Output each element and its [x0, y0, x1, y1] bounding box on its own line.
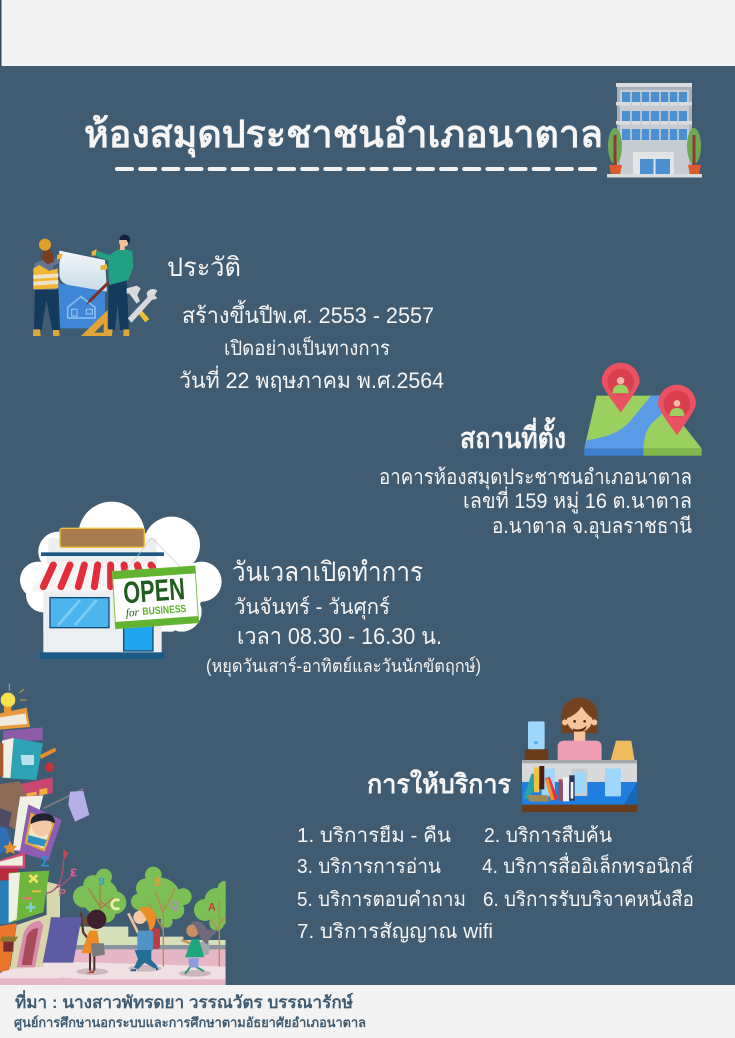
location line 2: เลขที่ 159 หมู่ 16 ต.นาตาล	[463, 486, 692, 514]
icon: workers with blueprint	[33, 235, 157, 336]
history text line 3: วันที่ 22 พฤษภาคม พ.ศ.2564	[179, 365, 444, 393]
heading: history: ประวัติ	[167, 252, 241, 282]
service 7: 7. บริการสัญญาณ wifi	[297, 921, 493, 943]
icon: shop in cloud with open sign	[20, 502, 222, 659]
pencil	[86, 282, 109, 305]
tree 2: 8	[154, 875, 161, 889]
title dashed underline	[117, 167, 597, 171]
illustration: book tower and children: P	[58, 888, 66, 900]
door	[124, 625, 153, 651]
shadows	[76, 968, 108, 975]
icon: library building	[607, 83, 702, 178]
awning	[32, 562, 157, 592]
service 6: 6. บริการรับบริจาคหนังสือ	[483, 889, 694, 911]
shop body	[43, 590, 162, 653]
icon: map with pins	[584, 363, 702, 456]
book stack	[0, 708, 30, 730]
section: history	[167, 252, 444, 393]
triangle ruler	[81, 310, 108, 336]
flag	[43, 789, 83, 808]
tools	[136, 308, 149, 322]
child 3	[182, 921, 217, 974]
tree 1	[73, 869, 126, 927]
tree 3: A	[208, 902, 216, 914]
source organization: ศูนย์การศึกษานอกระบบและการศึกษาตามอัธยาศัยอำเภอนาตาล	[14, 1015, 366, 1031]
bulb	[1, 683, 27, 714]
window	[50, 598, 109, 628]
top strip	[0, 0, 735, 66]
service 2: 2. บริการสืบค้น	[484, 825, 612, 847]
right worker	[108, 280, 129, 330]
street scene	[60, 866, 226, 985]
open sign: BUSINESS	[142, 603, 187, 618]
tree 1: 9	[98, 876, 105, 888]
open sign	[112, 566, 199, 629]
sheet of paper	[59, 251, 107, 292]
tree 3	[194, 881, 226, 967]
illustration: book tower and children: ε	[70, 865, 77, 881]
illustration: book tower and children	[0, 683, 232, 985]
location line 3: อ.นาตาล จ.อุบลราชธานี	[492, 515, 692, 539]
child 1	[81, 910, 106, 973]
heading: location: สถานที่ตั้ง	[460, 416, 566, 455]
child 2	[128, 907, 160, 971]
closed note: (หยุดวันเสาร์-อาทิตย์และวันนักขัตฤกษ์)	[206, 656, 481, 677]
days: วันจันทร์ - วันศุกร์	[234, 595, 390, 620]
service 5: 5. บริการตอบคำถาม	[297, 889, 466, 911]
title: ห้องสมุดประชาชนอำเภอนาตาล	[84, 114, 603, 158]
sign strings	[127, 538, 180, 570]
tree 2: Q	[170, 899, 179, 911]
service 1: 1. บริการยืม - คืน	[297, 825, 451, 847]
footer band	[0, 985, 735, 1038]
list: services	[297, 825, 694, 943]
service 4: 4. บริการสื่ออิเล็กทรอนิกส์	[482, 852, 693, 878]
heading: opening hours: วันเวลาเปิดทำการ	[232, 557, 423, 587]
section: opening hours	[206, 557, 481, 677]
icon: librarian at desk	[522, 697, 637, 812]
books	[523, 766, 575, 802]
tree 2	[131, 867, 192, 967]
backdrop	[73, 927, 226, 946]
hours: เวลา 08.30 - 16.30 น.	[237, 623, 442, 649]
cloud	[20, 502, 222, 632]
branch with letters	[47, 860, 75, 893]
history text line 2: เปิดอย่างเป็นทางการ	[224, 335, 390, 360]
heading: services: การให้บริการ	[367, 769, 511, 799]
left pavement	[0, 961, 60, 985]
base	[40, 652, 164, 659]
left worker	[34, 288, 60, 330]
sign board	[60, 528, 144, 547]
source credit: ที่มา : นางสาวพัทรดยา วรรณวัตร บรรณารักษ์	[15, 990, 353, 1012]
history text line 1: สร้างขึ้นปีพ.ศ. 2553 - 2557	[182, 300, 434, 328]
blueprint	[58, 283, 105, 328]
open sign: for	[125, 607, 140, 620]
service 3: 3. บริการการอ่าน	[297, 856, 441, 878]
open sign: OPEN	[122, 572, 186, 610]
illustration: book tower and children: Σ	[41, 855, 50, 871]
location line 1: อาคารห้องสมุดประชาชนอำเภอนาตาล	[379, 466, 692, 490]
section: location	[379, 416, 692, 539]
